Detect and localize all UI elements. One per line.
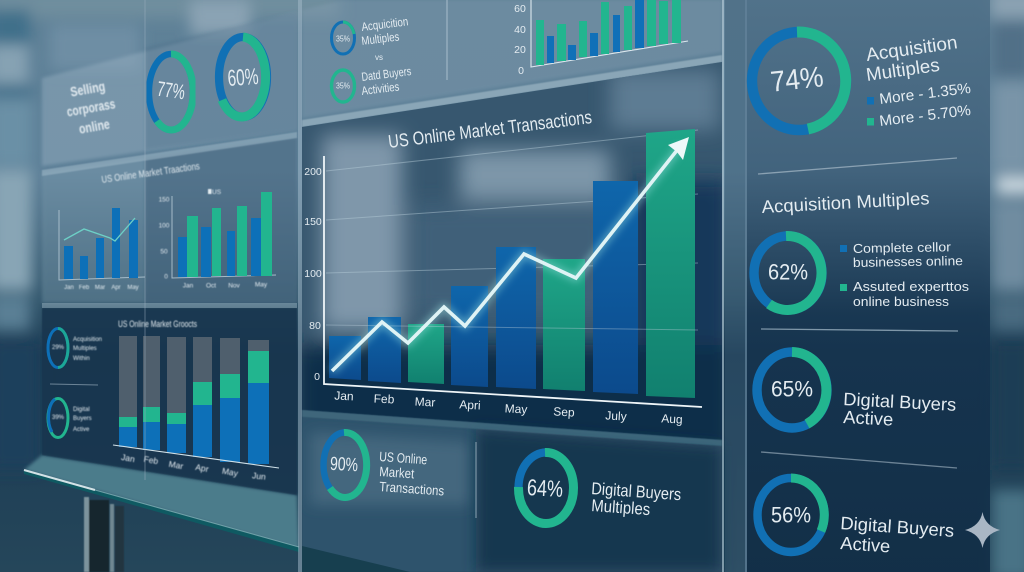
main bar and line chart: Feb [373, 391, 395, 407]
text: Digital Buyers Multiples [591, 479, 682, 519]
legend: business list: Complete cellor [853, 239, 952, 256]
ring: 74% [752, 32, 846, 130]
ring: data buyers 35%: 35% [336, 82, 350, 90]
ring group: small dark rings: 39% [52, 415, 65, 421]
heading: US Online Market Traactions: US Online Market Traactions [101, 160, 200, 186]
main bar and line chart: Jan [334, 389, 354, 403]
stacked bar chart [113, 336, 279, 482]
stacked bar chart: Feb [143, 454, 159, 466]
text: acquicition vs data buyers: Datd Buyers [361, 64, 412, 84]
text: Digital Buyers Multiples: Multiples [591, 496, 651, 519]
text: Acquisition Multiples legend [865, 31, 972, 130]
main bar and line chart: 100 [304, 268, 322, 280]
bar chart: top center: 20 [514, 44, 526, 56]
legend: business list: businesses online [853, 253, 963, 270]
ring group: small dark rings: 29% [52, 345, 65, 351]
panel: top center acquisition [302, 0, 722, 127]
text: Acquisition Multiples legend: Multiples [865, 54, 941, 85]
text: Digital Buyers Multiples: Digital Buyers [591, 479, 682, 504]
panel: bottom center [302, 410, 722, 572]
ring: 60%: 60% [227, 63, 259, 91]
ring: 77%: 77% [156, 78, 186, 104]
ring group: small dark rings [48, 328, 102, 438]
text: Digital Buyers Active lower [840, 513, 955, 556]
ring: 77% [149, 54, 193, 130]
text: selling corporass online [62, 78, 120, 138]
ring group: small dark rings: Within [73, 356, 90, 362]
bar chart: small right: US [212, 189, 222, 196]
vertical glass frames [145, 0, 746, 572]
text: US Online Market Transactions: Transactions [379, 479, 445, 499]
bar chart: small left: Jan [64, 285, 74, 291]
ring group: small dark rings: Multiples [73, 346, 97, 352]
bar chart: small right [159, 189, 276, 290]
bar chart: small right: Nov [228, 282, 241, 290]
panel: right column [747, 0, 990, 572]
text: selling corporass online: Selling [69, 79, 106, 100]
legend: business list: Assuted experttos [853, 279, 970, 294]
main bar and line chart: July [605, 408, 627, 424]
main bar and line chart: Aug [661, 411, 683, 427]
panel: small market charts [42, 132, 297, 303]
text: acquicition vs data buyers: vs [375, 53, 383, 62]
bar chart: small left [59, 208, 145, 291]
legend: business list [840, 239, 970, 309]
legend: business list: online business [853, 294, 950, 309]
ring: 65% [757, 352, 827, 428]
ring: 62% [754, 236, 822, 310]
ring: 74%: 74% [769, 61, 825, 99]
text: Acquisition Multiples legend: More - 5.70% [878, 102, 972, 130]
text: Digital Buyers Active lower: Active [840, 533, 891, 556]
text: acquicition vs data buyers: Activities [361, 79, 400, 98]
bar chart: top center [514, 0, 688, 77]
main bar and line chart: Sep [553, 404, 575, 420]
main bar and line chart: 80 [309, 320, 321, 332]
ring: 65%: 65% [771, 376, 813, 402]
bar chart: small right: May [255, 282, 268, 288]
panel: main chart [295, 60, 735, 455]
bar chart: small right: 150 [159, 196, 170, 204]
panel: selling corporate online [42, 12, 297, 166]
text: US Online Market Transactions: Market [379, 464, 415, 481]
bar chart: small right: 50 [160, 248, 168, 256]
bar chart: small right: 0 [164, 274, 168, 280]
ring group: small dark rings: Acquisition [73, 337, 102, 343]
heading: Acquisition Multiples: Acquisition Multiples [761, 188, 930, 217]
main bar and line chart: 0 [314, 371, 320, 383]
main bar and line chart: May [504, 401, 528, 417]
main bar and line chart: 150 [304, 216, 322, 228]
stacked bar chart: Mar [168, 459, 184, 471]
main bar and line chart: Apri [459, 397, 481, 413]
text: selling corporass online: corporass [66, 96, 116, 120]
text: Acquisition Multiples legend: Acquisition [865, 31, 959, 65]
stacked bar chart: Apr [195, 462, 210, 474]
stacked bar chart: Jan [120, 452, 136, 464]
text: Digital Buyers Active: Digital Buyers [843, 389, 957, 415]
ring: 64%: 64% [526, 474, 564, 502]
text: selling corporass online: online [78, 117, 111, 137]
bar chart: top center: 40 [514, 24, 526, 36]
ring: data buyers 35% [332, 70, 354, 102]
icon: sparkle [965, 512, 1000, 548]
stacked bar chart: Jun [252, 470, 267, 482]
text: Digital Buyers Active lower: Digital Buyers [840, 513, 955, 541]
bar chart: small left: Mar [95, 285, 105, 291]
bar chart: small left: Feb [79, 285, 90, 291]
ring group: small dark rings: Buyers [73, 416, 92, 422]
stacked bar chart: May [221, 466, 240, 478]
ring: 62%: 62% [768, 260, 808, 284]
text: Digital Buyers Active: Active [843, 407, 894, 430]
main bar and line chart: Mar [414, 394, 436, 410]
ring: 56% [758, 478, 824, 552]
text: US Online Market Transactions [379, 449, 445, 499]
heading: US Online Market Groocts: US Online Market Groocts [118, 319, 197, 330]
text: acquicition vs data buyers: Multiples [361, 29, 400, 48]
main bar and line chart: 200 [304, 166, 322, 178]
bar chart: top center: 0 [518, 65, 524, 77]
ring: acquicition 35% [332, 22, 354, 54]
bar chart: small right: 100 [159, 222, 170, 230]
bar chart: small right: Oct [206, 282, 216, 290]
text: acquicition vs data buyers: Acquicition [361, 14, 409, 34]
bar chart: small left: Apr [111, 285, 121, 291]
heading: US Online Market Transactions: US Online Market Transactions [387, 106, 593, 152]
ring: 90% [324, 432, 367, 498]
table: glass top and legs [24, 455, 299, 572]
arrow head [668, 137, 689, 160]
ring: acquicition 35%: 35% [336, 34, 350, 44]
ring: 56%: 56% [771, 502, 811, 528]
ring: 64% [518, 452, 574, 524]
ring group: small dark rings: Active [73, 427, 90, 433]
bar chart: top center: 60 [514, 3, 526, 15]
text: Acquisition Multiples legend: More - 1.35% [878, 80, 972, 108]
text: Digital Buyers Active [843, 389, 957, 430]
ring group: small dark rings: Digital [73, 407, 90, 413]
main bar and line chart [304, 129, 702, 427]
bar chart: small left: May [127, 285, 139, 291]
bar chart: small right: Jan [183, 282, 194, 290]
ring: 90%: 90% [329, 454, 359, 476]
panel: market groocts dark [42, 303, 297, 495]
ring: 60% [219, 37, 267, 117]
text: US Online Market Transactions: US Online [379, 449, 428, 467]
text: acquicition vs data buyers [361, 14, 412, 98]
